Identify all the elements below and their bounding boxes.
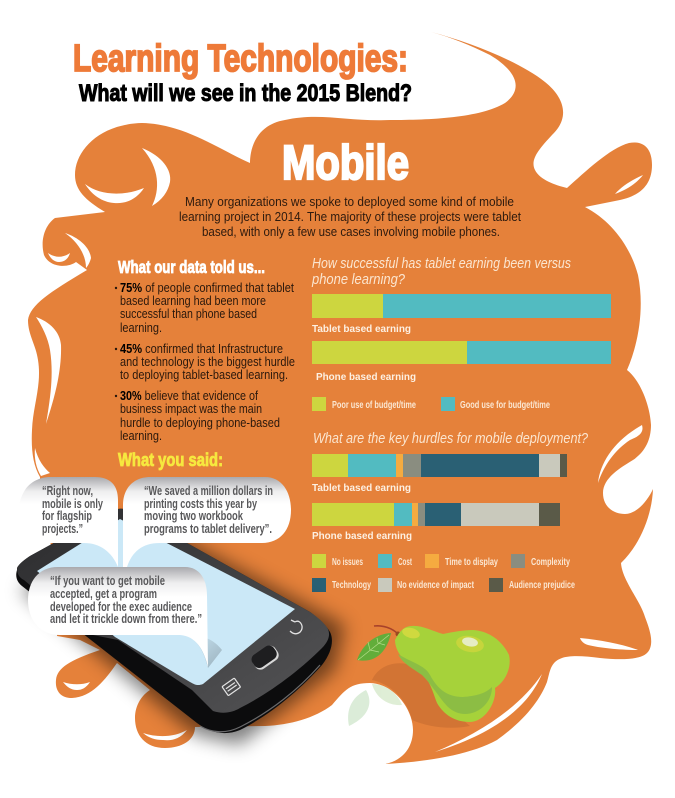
data bullets: successful than phone based (120, 307, 257, 321)
chart: tablet vs phone success: phone learning? (311, 272, 406, 288)
chart: key hurdles (312, 431, 589, 592)
chart: key hurdles: Complexity (531, 556, 570, 568)
chart: key hurdles: No evidence of impact (397, 579, 474, 591)
faded leaves (348, 684, 402, 726)
icon: back key (290, 620, 302, 634)
heading: what our data told us: What our data told us... (118, 257, 265, 277)
data bullets: hurdle to deploying phone-based (120, 416, 280, 430)
speech bubble 1: “Right now, (42, 483, 93, 498)
data bullets: learning. (120, 429, 162, 443)
subtitle: What will we see in the 2015 Blend? (79, 80, 412, 107)
intro text (179, 195, 521, 239)
chart: tablet vs phone success: Poor use of budget/time (332, 399, 416, 411)
speech bubble 1: projects.” (42, 521, 83, 536)
icon: home button (249, 643, 281, 672)
data bullets (115, 281, 295, 443)
heading: what you said: What you said: (118, 449, 223, 470)
speech bubble 2: printing costs this year by (144, 496, 258, 511)
chart: tablet vs phone success: Good use for budget/time (460, 399, 550, 411)
chart: tablet vs phone success: Tablet based earning (312, 323, 411, 335)
speech bubble 3: accepted, get a program (50, 586, 157, 601)
data bullets: 75% of people confirmed that tablet (120, 281, 294, 295)
icon: menu key (222, 678, 241, 696)
speech bubble 3 (28, 567, 222, 668)
chart: key hurdles: No issues (332, 556, 363, 568)
data bullets: learning. (120, 321, 162, 335)
speech bubble 1: mobile is only (42, 496, 104, 511)
chart: key hurdles: Audience prejudice (509, 579, 575, 591)
speech bubble 2 (123, 477, 291, 567)
chart: tablet vs phone success: How successful has tablet earning been versus (312, 256, 571, 272)
speech bubble 2: programs to tablet delivery”. (144, 521, 272, 536)
data bullets: 30% believe that evidence of (120, 389, 258, 403)
illustration: smartphone (16, 509, 345, 745)
title: Learning Technologies: (73, 38, 408, 80)
speech bubble 2: “We saved a million dollars in (144, 483, 273, 498)
data bullets: based learning had been more (120, 294, 266, 308)
illustration: pear (348, 626, 510, 728)
data bullets: to deploying tablet-based learning. (120, 368, 288, 382)
intro text: Many organizations we spoke to deployed some kind of mobile (185, 195, 514, 209)
heading: Mobile: Mobile (282, 137, 409, 190)
speech bubble 3: and let it trickle down from there.” (50, 611, 202, 626)
speech bubble 2: moving two workbook (144, 508, 244, 523)
data bullets: business impact was the main (120, 402, 262, 416)
chart: key hurdles: Technology (332, 579, 371, 591)
data bullets: and technology is the biggest hurdle (120, 355, 295, 369)
speech bubble 3: “If you want to get mobile (50, 573, 165, 588)
chart: key hurdles: Tablet based earning (312, 482, 411, 494)
chart: key hurdles: Cost (398, 556, 412, 568)
data bullets: 45% confirmed that Infrastructure (120, 342, 283, 356)
chart: key hurdles: Phone based earning (312, 530, 412, 542)
chart: key hurdles: Time to display (445, 556, 498, 568)
speech bubble 1: for flagship (42, 508, 92, 523)
intro text: learning project in 2014. The majority of these projects were tablet (179, 210, 521, 224)
intro text: based, with only a few use cases involving mobile phones. (202, 225, 500, 239)
speech bubble 1 (18, 477, 118, 567)
chart: key hurdles: What are the key hurdles for mobile deployment? (313, 431, 589, 447)
chart: tablet vs phone success (311, 256, 611, 411)
speech bubble 3: developed for the exec audience (50, 599, 192, 614)
chart: tablet vs phone success: Phone based earning (316, 371, 416, 383)
